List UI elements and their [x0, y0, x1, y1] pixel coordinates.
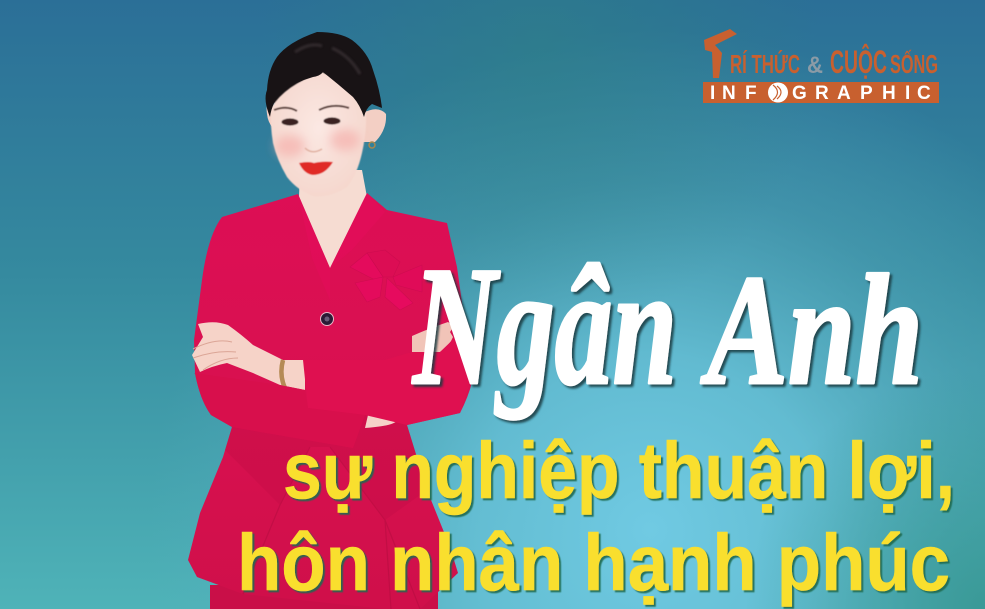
- portrait of woman in red suit: [188, 32, 475, 609]
- logo wordmark: RÍ THỨC: [730, 49, 800, 79]
- logo wordmark: &: [807, 52, 823, 79]
- logo wordmark: CUỘC: [830, 44, 887, 80]
- trousers: [210, 585, 438, 609]
- logo orange bar: [703, 82, 939, 103]
- face: [271, 72, 366, 196]
- back of hair: [270, 40, 374, 130]
- logo globe icon: [768, 82, 788, 102]
- nose: [305, 148, 322, 152]
- title: name in white script: [412, 232, 923, 420]
- logo roof mark: [704, 29, 737, 78]
- logo wordmark: SỐNG: [890, 49, 938, 79]
- finger lines: [193, 341, 238, 370]
- bracelet: [281, 360, 285, 388]
- logo infographic text: INFOGRAPHIC: [710, 83, 931, 104]
- hair: [266, 32, 382, 117]
- logo: Tri Thuc & Cuoc Song Infographic: [703, 29, 939, 104]
- left hand and wrist: [192, 322, 305, 390]
- lapel shading: [298, 193, 385, 300]
- bow: [350, 250, 422, 310]
- subtitle in yellow: [237, 426, 955, 607]
- first name: Ngân: [412, 232, 677, 420]
- logo wordmark: [730, 44, 938, 80]
- lips: [299, 162, 333, 175]
- jacket: [188, 193, 475, 609]
- hair highlight: [295, 45, 360, 74]
- sleeve shadow: [225, 415, 427, 520]
- jacket hem fold: [243, 447, 420, 609]
- last name: Anh: [700, 243, 923, 418]
- eyes: [282, 118, 298, 126]
- button: [320, 312, 334, 326]
- upper left sleeve: [194, 373, 365, 448]
- ear and earring: [363, 109, 386, 148]
- eyebrows: [274, 108, 297, 111]
- right hand: [412, 322, 453, 360]
- forearm cuff: [303, 330, 475, 425]
- neck: [299, 170, 367, 272]
- lower hand: [365, 415, 397, 428]
